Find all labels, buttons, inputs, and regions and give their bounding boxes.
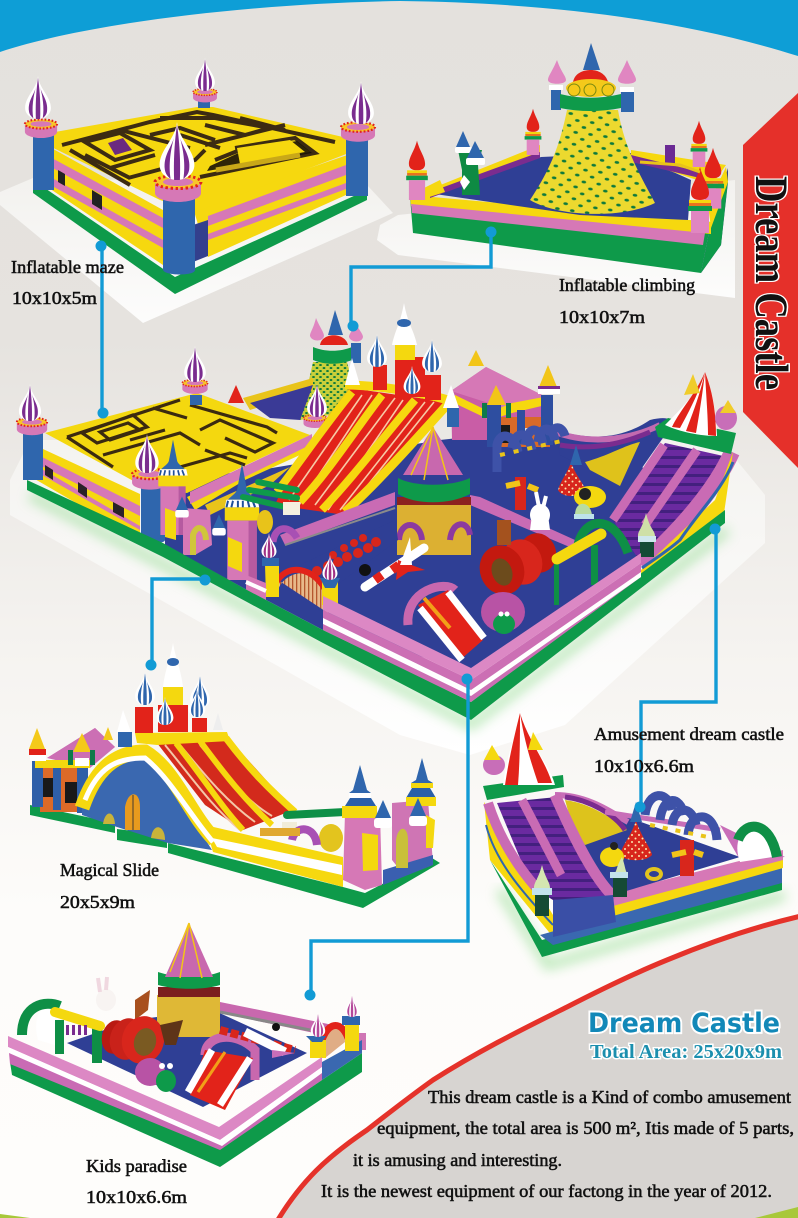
connector: magical slide bbox=[146, 574, 210, 670]
kids back wall bbox=[220, 1002, 333, 1037]
climbing tower head bbox=[548, 43, 636, 112]
connector: amusement dream castle bbox=[634, 524, 720, 812]
description text: This dream castle is a Kind of combo amusement bbox=[428, 1087, 791, 1107]
main purple ball and frog bbox=[481, 592, 525, 634]
label: kids paradise: Kids paradise bbox=[86, 1156, 187, 1176]
main pale cone tower bbox=[638, 513, 656, 557]
label: inflatable climbing: Inflatable climbing bbox=[559, 275, 695, 295]
main purple back slope bbox=[555, 418, 672, 486]
climbing red towers bbox=[406, 109, 724, 233]
slide green base bbox=[30, 805, 440, 908]
main yellow bar and green posts bbox=[554, 534, 601, 605]
label: magical slide: Magical Slide bbox=[60, 860, 159, 880]
label: amusement dream castle: 10x10x6.6m bbox=[594, 756, 694, 776]
description text: It is the newest equipment of our factong in the year of 2012. bbox=[321, 1181, 772, 1201]
main blue floor bbox=[165, 430, 680, 670]
main circus tent bbox=[655, 372, 737, 454]
amusement green base bbox=[490, 860, 782, 957]
climbing front bands bbox=[410, 195, 711, 234]
maze right wall bbox=[193, 150, 362, 262]
amusement yellow ring bbox=[647, 869, 661, 879]
amusement red cone bbox=[620, 802, 652, 860]
floor: main structure bbox=[10, 440, 765, 755]
main left pink castle bbox=[158, 440, 259, 580]
climbing base bbox=[410, 197, 711, 273]
description text: it is amusing and interesting. bbox=[353, 1150, 562, 1170]
climbing blue towers bbox=[455, 131, 485, 195]
kids blue floor bbox=[67, 1010, 307, 1107]
main pink roof house bbox=[451, 350, 560, 447]
kids front walls bbox=[8, 1036, 322, 1150]
product: magical slide bbox=[29, 643, 440, 908]
amusement green glow bbox=[500, 890, 785, 965]
main red balls pit bbox=[300, 520, 398, 590]
product: main combined dream castle bbox=[17, 303, 737, 725]
label: magical slide bbox=[60, 860, 159, 912]
product: amusement dream castle bbox=[483, 713, 785, 965]
kids rabbit and fox bbox=[96, 977, 150, 1020]
slide blue hump bbox=[82, 753, 212, 850]
bottom right green corner bbox=[755, 1207, 798, 1218]
kids horse bbox=[160, 1020, 183, 1045]
bottom grey description panel bbox=[272, 914, 798, 1218]
climbing back walls bbox=[428, 145, 540, 197]
heading: dream castle total area: Total Area: 25x20x9m bbox=[590, 1041, 782, 1063]
main front pink walls bbox=[323, 553, 641, 702]
heading: dream castle total area: Dream Castle bbox=[588, 1008, 780, 1039]
kids red tunnel bbox=[98, 1011, 169, 1069]
maze left wall bbox=[37, 140, 163, 265]
slide green bars and barrel bbox=[260, 812, 345, 852]
label: inflatable maze bbox=[11, 257, 124, 308]
kids purple ball and frog bbox=[135, 1058, 176, 1092]
product: inflatable climbing bbox=[406, 43, 728, 273]
climbing purple posts bbox=[640, 145, 700, 172]
label: magical slide: 20x5x9m bbox=[60, 892, 135, 912]
maze green base bbox=[33, 180, 367, 294]
main cone tower red bbox=[558, 445, 585, 496]
amusement floor and yellow hill bbox=[555, 795, 785, 895]
label: kids paradise: 10x10x6.6m bbox=[86, 1187, 187, 1207]
main green bars and barrel bbox=[243, 482, 300, 542]
red ribbon with title bbox=[743, 93, 798, 468]
main plane bbox=[359, 537, 425, 587]
kids red arch towers bbox=[306, 995, 366, 1080]
amusement green arch bbox=[737, 824, 777, 862]
bottom left green corner bbox=[0, 1214, 30, 1218]
main small slide with pink arch bbox=[408, 586, 484, 660]
slide rim and run-out bbox=[82, 752, 343, 887]
label: inflatable climbing: 10x10x7m bbox=[559, 307, 645, 327]
description text: equipment, the total area is 500 m², Itis made of 5 parts, bbox=[377, 1118, 794, 1138]
product: inflatable maze bbox=[25, 58, 375, 294]
label: inflatable maze: Inflatable maze bbox=[11, 257, 124, 277]
kids central tower bbox=[157, 923, 220, 1037]
main top red castle bbox=[345, 303, 459, 427]
floor: climbing bbox=[377, 180, 735, 298]
amusement arches bbox=[645, 796, 717, 840]
label: inflatable maze: 10x10x5m bbox=[12, 288, 97, 308]
label: kids paradise bbox=[86, 1156, 187, 1207]
main rabbit and red tunnel bbox=[473, 492, 562, 601]
amusement circus tent bbox=[483, 713, 564, 800]
slide right castle bbox=[342, 758, 436, 890]
connector: kids paradise bbox=[304, 674, 472, 1000]
kids slide bbox=[188, 1037, 255, 1110]
main base glow bbox=[30, 495, 727, 725]
main back climbing tower bbox=[228, 310, 363, 420]
main green arch bbox=[578, 523, 628, 553]
connector: inflatable climbing bbox=[348, 226, 496, 332]
heading: dream castle total area bbox=[588, 1008, 782, 1063]
connector: inflatable maze bbox=[96, 240, 108, 418]
amusement side walls bbox=[484, 802, 783, 945]
product: kids paradise bbox=[8, 923, 366, 1167]
main triple slide bbox=[275, 385, 448, 545]
main circus slide bbox=[611, 443, 733, 578]
main bee and tower bbox=[574, 486, 606, 519]
maze top with passages bbox=[37, 107, 362, 212]
amusement cross post bbox=[672, 840, 703, 876]
ribbon text: Dream Castle bbox=[745, 176, 797, 390]
slide top platform bbox=[135, 732, 230, 745]
label: amusement dream castle bbox=[594, 724, 784, 776]
label: amusement dream castle: Amusement dream castle bbox=[594, 724, 784, 744]
kids green base bbox=[10, 1053, 362, 1167]
slide top red castle bbox=[117, 643, 223, 747]
main central tower bbox=[397, 427, 471, 555]
climbing floor bbox=[428, 153, 691, 220]
main cross post bbox=[506, 477, 538, 510]
label: inflatable climbing bbox=[559, 275, 695, 327]
floor: maze bbox=[0, 178, 393, 323]
main maze towers bbox=[17, 346, 327, 543]
main low pink divider bbox=[470, 495, 575, 548]
kids left arch and bar bbox=[22, 1004, 102, 1063]
amusement bee and towers bbox=[532, 842, 628, 916]
main blue arches bbox=[497, 428, 566, 472]
slide lanes bbox=[157, 738, 295, 830]
main maze section bbox=[30, 393, 312, 540]
description text bbox=[321, 1087, 794, 1201]
main green base bbox=[27, 480, 725, 720]
amusement slide lanes bbox=[488, 795, 616, 937]
main red arch fence bbox=[246, 533, 340, 613]
top blue arc banner bbox=[0, 0, 798, 56]
maze towers bbox=[25, 58, 375, 274]
climbing cone bbox=[530, 110, 655, 214]
slide left house bbox=[29, 727, 115, 813]
kids plane and balls bbox=[220, 1023, 295, 1058]
